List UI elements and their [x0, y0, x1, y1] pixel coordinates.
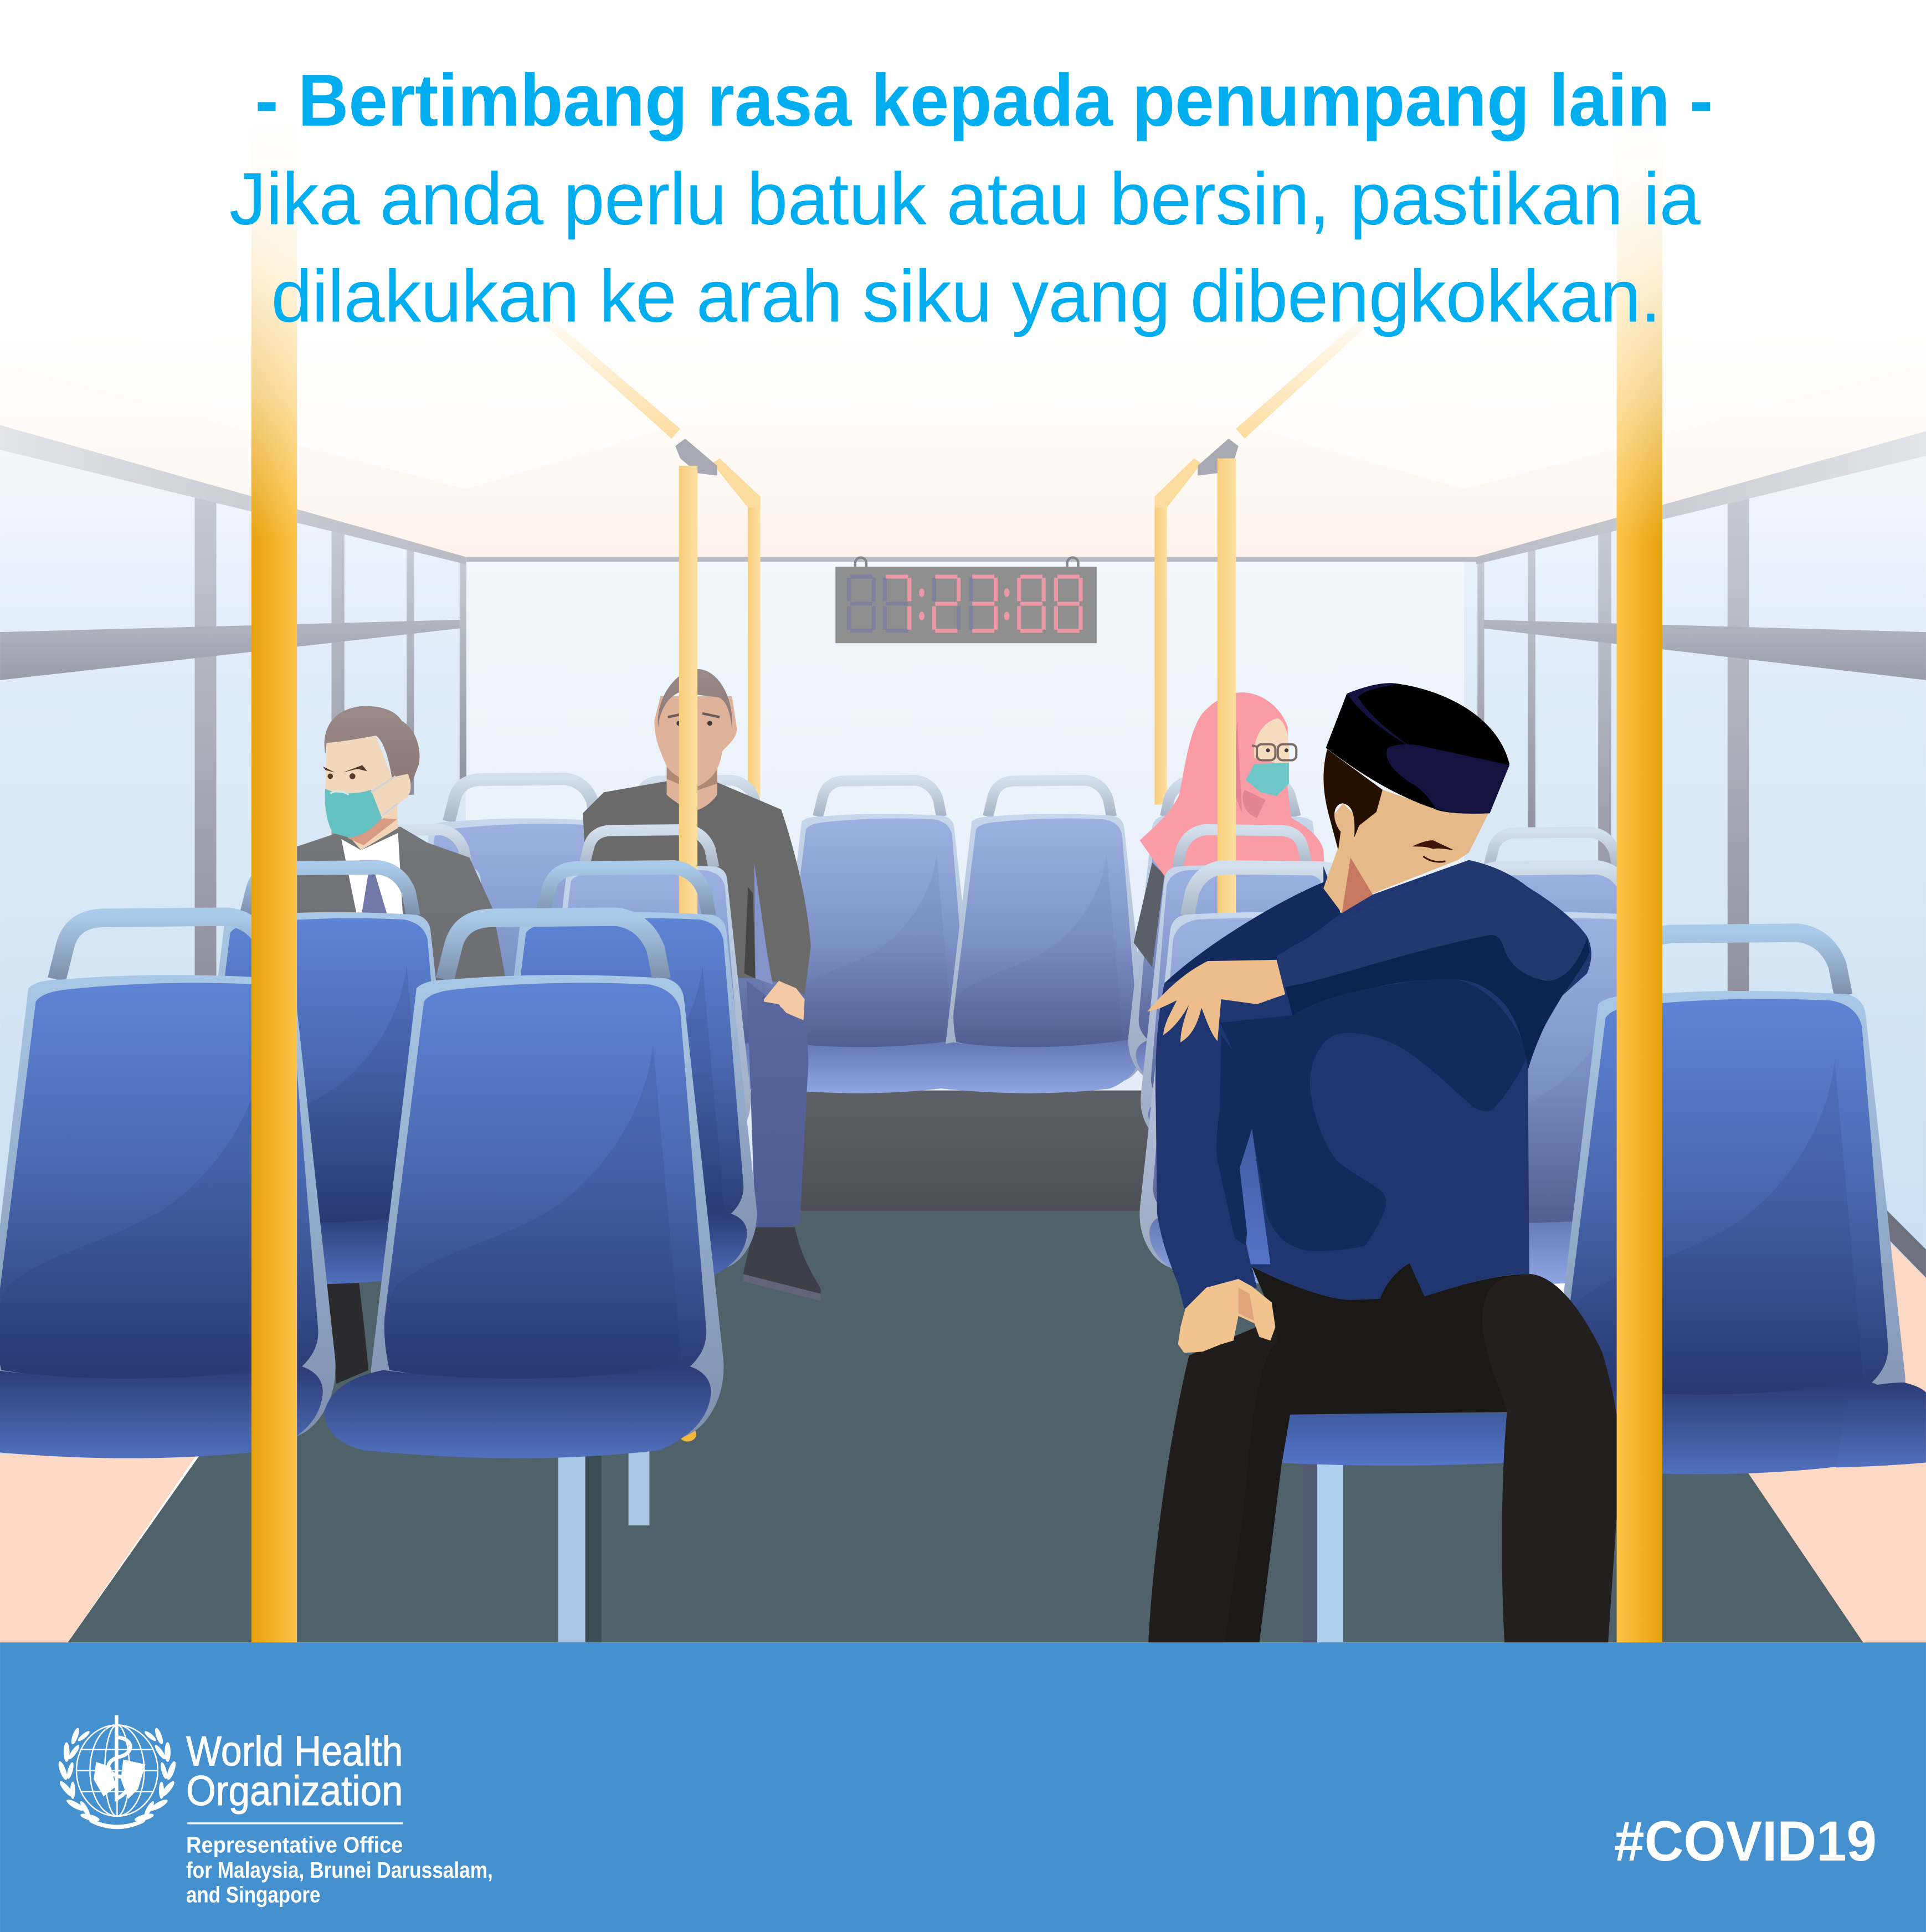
closed eye	[1423, 856, 1445, 862]
jacket	[297, 827, 506, 1281]
pole front right	[1617, 123, 1662, 1645]
eyebrows	[668, 713, 720, 717]
digit 8	[1056, 577, 1081, 631]
footer band	[0, 1642, 1926, 1932]
mask strap	[371, 776, 398, 816]
digit 0	[849, 577, 874, 631]
pole far right	[1154, 503, 1167, 805]
eyebrows and eyes	[323, 765, 367, 779]
trousers	[1148, 1263, 1620, 1642]
back row seat left	[749, 780, 977, 1093]
pole mid right	[1218, 459, 1236, 951]
digit 2	[934, 577, 959, 631]
digit 7	[885, 577, 910, 631]
second row seat right of aisle	[1139, 867, 1447, 1284]
dark clothing	[1134, 862, 1164, 967]
dark band under forearm	[1285, 935, 1590, 1070]
cap	[1326, 683, 1509, 814]
back row seat behind man in black	[566, 780, 793, 1093]
back row seat right	[919, 780, 1147, 1093]
front seat centre leg	[558, 1454, 602, 1642]
laurel	[57, 1727, 100, 1823]
digit 8	[1019, 577, 1044, 631]
ribbon	[86, 1816, 148, 1829]
WHO name line 2: Organization	[186, 1768, 403, 1815]
ceiling beam left lower	[712, 459, 761, 507]
clock hooks	[855, 558, 1078, 567]
neck	[667, 758, 717, 811]
neck shadow	[347, 818, 397, 845]
pole joint right	[1198, 439, 1239, 476]
second row seat left	[153, 867, 461, 1284]
right thigh	[1482, 1274, 1620, 1642]
torso	[583, 781, 811, 994]
front seat centre	[324, 917, 723, 1458]
shirt	[341, 833, 403, 918]
digit 3	[971, 577, 995, 631]
face	[654, 696, 737, 786]
mask	[325, 789, 382, 838]
WHO name line 1: World Health	[186, 1729, 403, 1775]
front seat right cushion extension	[1836, 1383, 1926, 1467]
hand on knee	[1178, 1279, 1275, 1353]
back wall	[466, 561, 1464, 1226]
torso and arm	[1155, 860, 1591, 1308]
ceiling beam left	[542, 318, 680, 439]
right bus window	[1464, 431, 1926, 1466]
office line 3: and Singapore	[186, 1882, 320, 1908]
seat leg	[1317, 1460, 1343, 1642]
neck	[345, 795, 398, 850]
third row seat far right	[1416, 832, 1655, 1157]
mask	[1246, 763, 1289, 796]
second row seat centre	[449, 867, 757, 1284]
gap between arm and torso	[1240, 1129, 1271, 1264]
heading line 1: - Bertimbang rasa kepada penumpang lain -	[255, 59, 1713, 142]
chest shadow	[1220, 979, 1528, 1251]
trousers	[747, 981, 808, 1230]
seat under coughing man	[1275, 1413, 1511, 1642]
neck shadow	[1342, 857, 1373, 913]
left bus window	[0, 431, 466, 1466]
pole fade right	[1615, 121, 1663, 542]
passenger: man in suit with mask	[297, 706, 506, 1384]
hand on shoulder	[1147, 960, 1285, 1042]
eyes	[676, 721, 712, 726]
trousers	[323, 1269, 368, 1384]
gap between arm and body	[754, 862, 773, 984]
floor	[68, 1211, 1863, 1642]
shoe	[743, 1227, 821, 1301]
fourth row seat left	[367, 779, 639, 1147]
staff and serpent	[116, 1715, 117, 1801]
back step	[789, 1091, 1158, 1211]
ceiling beam right lower	[1154, 459, 1201, 507]
continents	[94, 1760, 146, 1799]
passenger: man coughing into elbow	[1147, 683, 1620, 1642]
hijab shade	[1232, 721, 1266, 818]
upper arm shade	[1164, 882, 1343, 983]
hashtag: #COVID19	[1614, 1809, 1877, 1873]
face	[325, 736, 410, 819]
bent-arm sleeve	[1277, 860, 1587, 987]
clock	[835, 558, 1097, 643]
pole joint left	[675, 439, 717, 476]
passenger: woman in pink hijab	[1134, 692, 1324, 967]
yellow seat fitting	[679, 1427, 696, 1442]
face	[1254, 718, 1289, 767]
glasses	[1252, 744, 1296, 761]
mask wire	[330, 792, 349, 795]
ceiling light panel	[0, 0, 1926, 489]
arm fold	[744, 887, 756, 978]
WHO divider	[187, 1822, 403, 1825]
body line 3: dilakukan ke arah siku yang dibengkokkan.	[271, 255, 1661, 338]
seat cushion	[1275, 1413, 1511, 1466]
hair	[325, 706, 419, 784]
neck shadow	[667, 767, 717, 791]
left thigh	[1148, 1319, 1278, 1642]
eyebrow	[1412, 840, 1454, 850]
clock colons	[919, 588, 1009, 620]
window sill stripe right	[1879, 1203, 1926, 1278]
back wall top rail	[466, 557, 1476, 562]
third row seat right of aisle	[1141, 830, 1380, 1155]
hair	[1323, 749, 1383, 850]
left window frame	[0, 425, 466, 979]
passenger: man in black shirt	[583, 669, 821, 1301]
hijab	[1140, 692, 1324, 876]
neck and face	[1323, 790, 1488, 913]
second row seat leg	[629, 1442, 649, 1525]
ceiling	[0, 0, 1926, 567]
pole front left	[251, 123, 297, 1645]
right window frame	[1476, 431, 1926, 998]
hand	[764, 981, 805, 1020]
clock panel	[835, 567, 1097, 643]
eyes	[1266, 748, 1288, 752]
floor side right	[1740, 1241, 1926, 1642]
globe	[76, 1725, 158, 1816]
shoe sole	[743, 1274, 821, 1301]
cap fold	[1347, 683, 1509, 814]
pole far left	[748, 503, 761, 798]
body line 2: Jika anda perlu batuk atau bersin, pastikan ia	[229, 158, 1701, 240]
second row seat far right	[1372, 867, 1680, 1284]
knuckle shadow	[1239, 1288, 1255, 1321]
floor side left	[0, 1454, 197, 1642]
ceiling beam right	[1236, 318, 1370, 439]
third row seat left	[265, 830, 505, 1155]
tie	[360, 860, 388, 918]
WHO emblem	[57, 1715, 177, 1829]
pole fade left	[250, 121, 298, 542]
hair	[658, 669, 732, 729]
office line 1: Representative Office	[186, 1832, 403, 1858]
third row seat centre	[511, 830, 751, 1155]
arm dark stripe	[1216, 1035, 1252, 1246]
front seat right	[1506, 933, 1906, 1474]
front seat left	[0, 917, 336, 1458]
office line 2: for Malaysia, Brunei Darussalam,	[186, 1857, 493, 1883]
pole mid left	[679, 466, 697, 916]
back row seat behind woman	[1128, 780, 1368, 1093]
